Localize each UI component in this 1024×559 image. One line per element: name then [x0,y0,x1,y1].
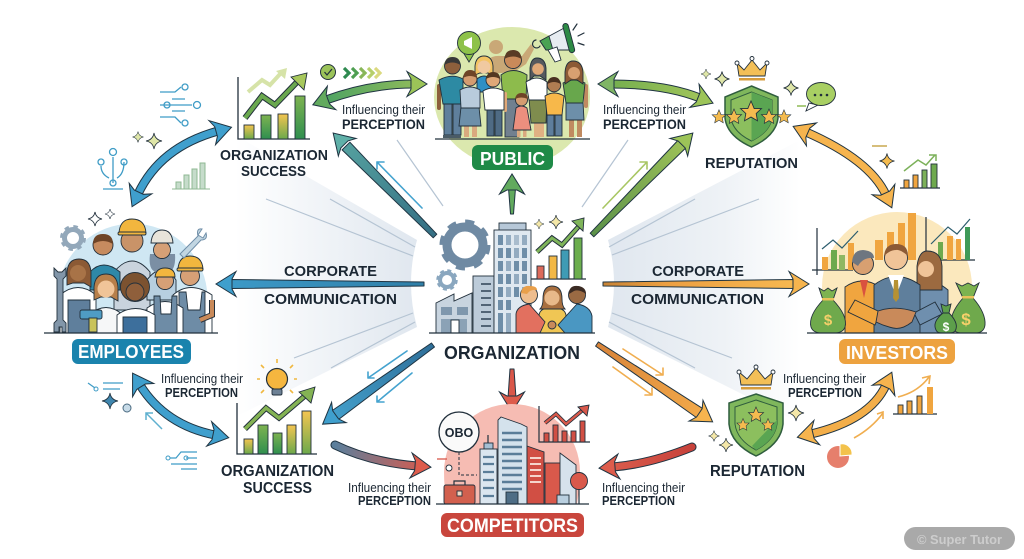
icon: pie chart [827,444,852,468]
person big man green [501,50,527,137]
icon: circuit top [160,84,200,126]
arrow: organization to competitors [508,369,516,398]
label: organization success top [220,147,328,180]
small accent arrows [368,162,663,402]
label: organization success top: SUCCESS [241,163,306,180]
icon: sparkles [88,209,115,226]
person small girl pink [513,93,531,137]
arrow: organization to lower reputation [596,342,704,419]
arrow: employees to lower organization success (two-way) [140,385,215,435]
label: influencing perception top-left: PERCEPTION [342,117,425,132]
ground line [436,503,589,505]
label: public: PUBLIC [480,149,545,169]
label: reputation lower: REPUTATION [710,463,805,480]
icon: drill [80,310,102,332]
arrow: organization success to competitors [335,445,417,466]
public backdrop circle [434,27,590,167]
label: influencing perception competitors right [602,481,685,508]
label: influencing perception competitors right: PERCEPTION [602,493,675,508]
investor woman [917,251,948,333]
icon: reputation shield lower [708,365,804,456]
person man teal [437,57,463,138]
label: influencing perception competitors left [348,481,431,508]
back figure waving [488,40,534,74]
label: influencing perception lower-left [161,372,243,400]
stars [712,101,791,123]
label: competitors: COMPETITORS [447,516,578,537]
arrow: corporate communication to investors [603,280,795,288]
label: influencing perception competitors left: Influencing their [348,481,431,495]
worker yellow helmet right [173,256,212,333]
arrow: organization to public [508,188,516,214]
label: influencing perception lower-left: Influencing their [161,372,243,386]
label: corporate communication left: CORPORATE [284,263,377,280]
label: corporate communication left: COMMUNICATION [264,291,397,308]
icon: check circle [320,64,336,80]
background fan: right [608,140,800,423]
icon: employees group [44,209,218,333]
watermark: © Super Tutor [917,532,1002,547]
money bag right [951,283,985,333]
arrow: employees to organization success (two-way) [138,131,218,194]
arrow: public to reputation (two-way) [612,84,700,98]
icon: green speech bubble [797,82,836,111]
worker afro [117,272,155,333]
icon: three people shaking hands [516,286,592,333]
icon: sparkles [534,215,563,229]
label: organization success lower [221,463,334,497]
person woman black hair [526,58,547,137]
icon: reputation shield top [701,56,798,147]
person boy orange [545,77,564,136]
arrow: organization to organization success [342,142,437,238]
chart: small bars near investors [900,155,940,188]
shield [725,86,778,147]
backdrop circle [444,404,580,504]
shield [729,394,783,456]
building B tower [498,417,527,504]
icon: chevrons [344,68,380,78]
person boy white shirt [483,72,507,136]
worker blonde [89,274,123,333]
icon: small gear [438,270,456,290]
label: investors: INVESTORS [846,343,948,363]
icon: organization center illustration [429,215,595,333]
person blonde woman [475,56,493,92]
ground line [435,138,590,140]
label: corporate communication left [264,263,397,308]
label: influencing perception top-left [342,103,425,132]
worker teal shirt [90,234,120,290]
icon: OBO circle [439,412,479,452]
label: influencing perception lower-right [783,372,866,400]
icon: left wrench [54,268,66,332]
label: organization: ORGANIZATION [444,343,580,363]
building A [480,435,497,504]
money bag small: $ [943,320,950,334]
label: employees: EMPLOYEES [78,342,184,362]
icon: megaphone [533,23,584,62]
label: influencing perception top-right: Influencing their [603,103,686,117]
label: reputation top: REPUTATION [705,155,798,172]
money bag left [810,288,846,333]
label: public [472,145,553,170]
ground line [807,332,987,334]
building D [545,453,576,504]
label: influencing perception competitors right: Influencing their [602,481,685,495]
label: organization success lower: ORGANIZATION [221,463,334,480]
money bag small [935,304,956,334]
baseline [429,332,595,334]
sparkles [701,69,798,96]
chart: centre orange bars [875,213,916,260]
investor man centre [874,244,920,333]
icon: lower-left decorations [88,383,197,469]
icon: factory [436,293,472,333]
icon: green speech bubble [458,32,480,62]
arrow: lower reputation to investors (two-way) [811,385,886,434]
arrow: corporate communication to employees [230,280,424,288]
icon: large gear [442,222,488,268]
crown [735,56,769,80]
tree [570,472,588,504]
back centre worker with helmet [114,219,150,310]
label: influencing perception lower-left: PERCEPTION [165,385,238,400]
icon: OBO circle: OBO [445,426,474,440]
chart: faded bars [172,163,210,189]
money bag right: $ [961,310,971,329]
icon: investors illustration [807,212,987,334]
stars [737,407,774,430]
small orange arrow [854,412,883,438]
icon: briefcase [444,481,475,504]
chart: left small bars [812,228,858,275]
building C red [527,446,544,504]
icon: upper wrench [180,229,206,258]
icon: sparkle and dash near investors [872,146,894,168]
watermark [904,527,1015,550]
money bag left: $ [824,312,833,329]
icon: light bulb [257,359,297,395]
person girl blue skirt [459,70,481,137]
chart: competitor bars [539,405,590,442]
arrow: reputation to investors (two-way) [806,132,886,195]
investor man left [845,250,880,333]
sparkles [708,405,804,452]
chart: organization growth bars [531,218,586,279]
crown [737,365,775,390]
connector [459,452,477,475]
label: organization success lower: SUCCESS [243,480,312,497]
icon: mid building [473,276,494,333]
icon: tower [494,223,531,333]
chart: right small bars [926,217,975,260]
arrow: organization success to public (two-way) [326,84,413,100]
background fan: left [235,135,417,417]
label: organization success top: ORGANIZATION [220,147,328,164]
label: influencing perception lower-right: PERCEPTION [788,385,862,400]
backdrop circle [822,212,972,333]
worker helmet right front [147,268,183,333]
label: influencing perception top-right [603,103,686,132]
arrow: reputation to competitors [613,447,692,467]
worker long hair, overalls [60,259,96,333]
background rays [266,140,759,368]
label: influencing perception top-left: Influencing their [342,103,425,117]
person woman brown hair [563,61,588,137]
icon: competitors illustration [436,404,590,504]
icon: public group [434,23,590,167]
employee backdrop circle [58,224,207,333]
icon: gear [62,226,84,250]
label: influencing perception top-right: PERCEPTION [603,117,686,132]
worker grey helmet [147,230,176,300]
marker [437,459,452,471]
label: corporate communication right: COMMUNICATION [631,291,764,308]
icon: circuit left [98,148,127,189]
arrow: organization to lower organization success [331,343,434,420]
icon: organization success chart lower [237,387,317,454]
ground line [44,332,218,334]
icon: sparkles top-left [132,132,162,149]
label: corporate communication right [631,263,764,308]
label: influencing perception competitors left: PERCEPTION [358,493,431,508]
label: influencing perception lower-right: Influencing their [783,372,866,386]
label: corporate communication right: CORPORATE [652,263,744,280]
handshake [848,300,942,328]
icon: organization success chart top [238,68,310,139]
arrow: organization to reputation [590,139,687,237]
chart: lower right bars [893,376,937,414]
